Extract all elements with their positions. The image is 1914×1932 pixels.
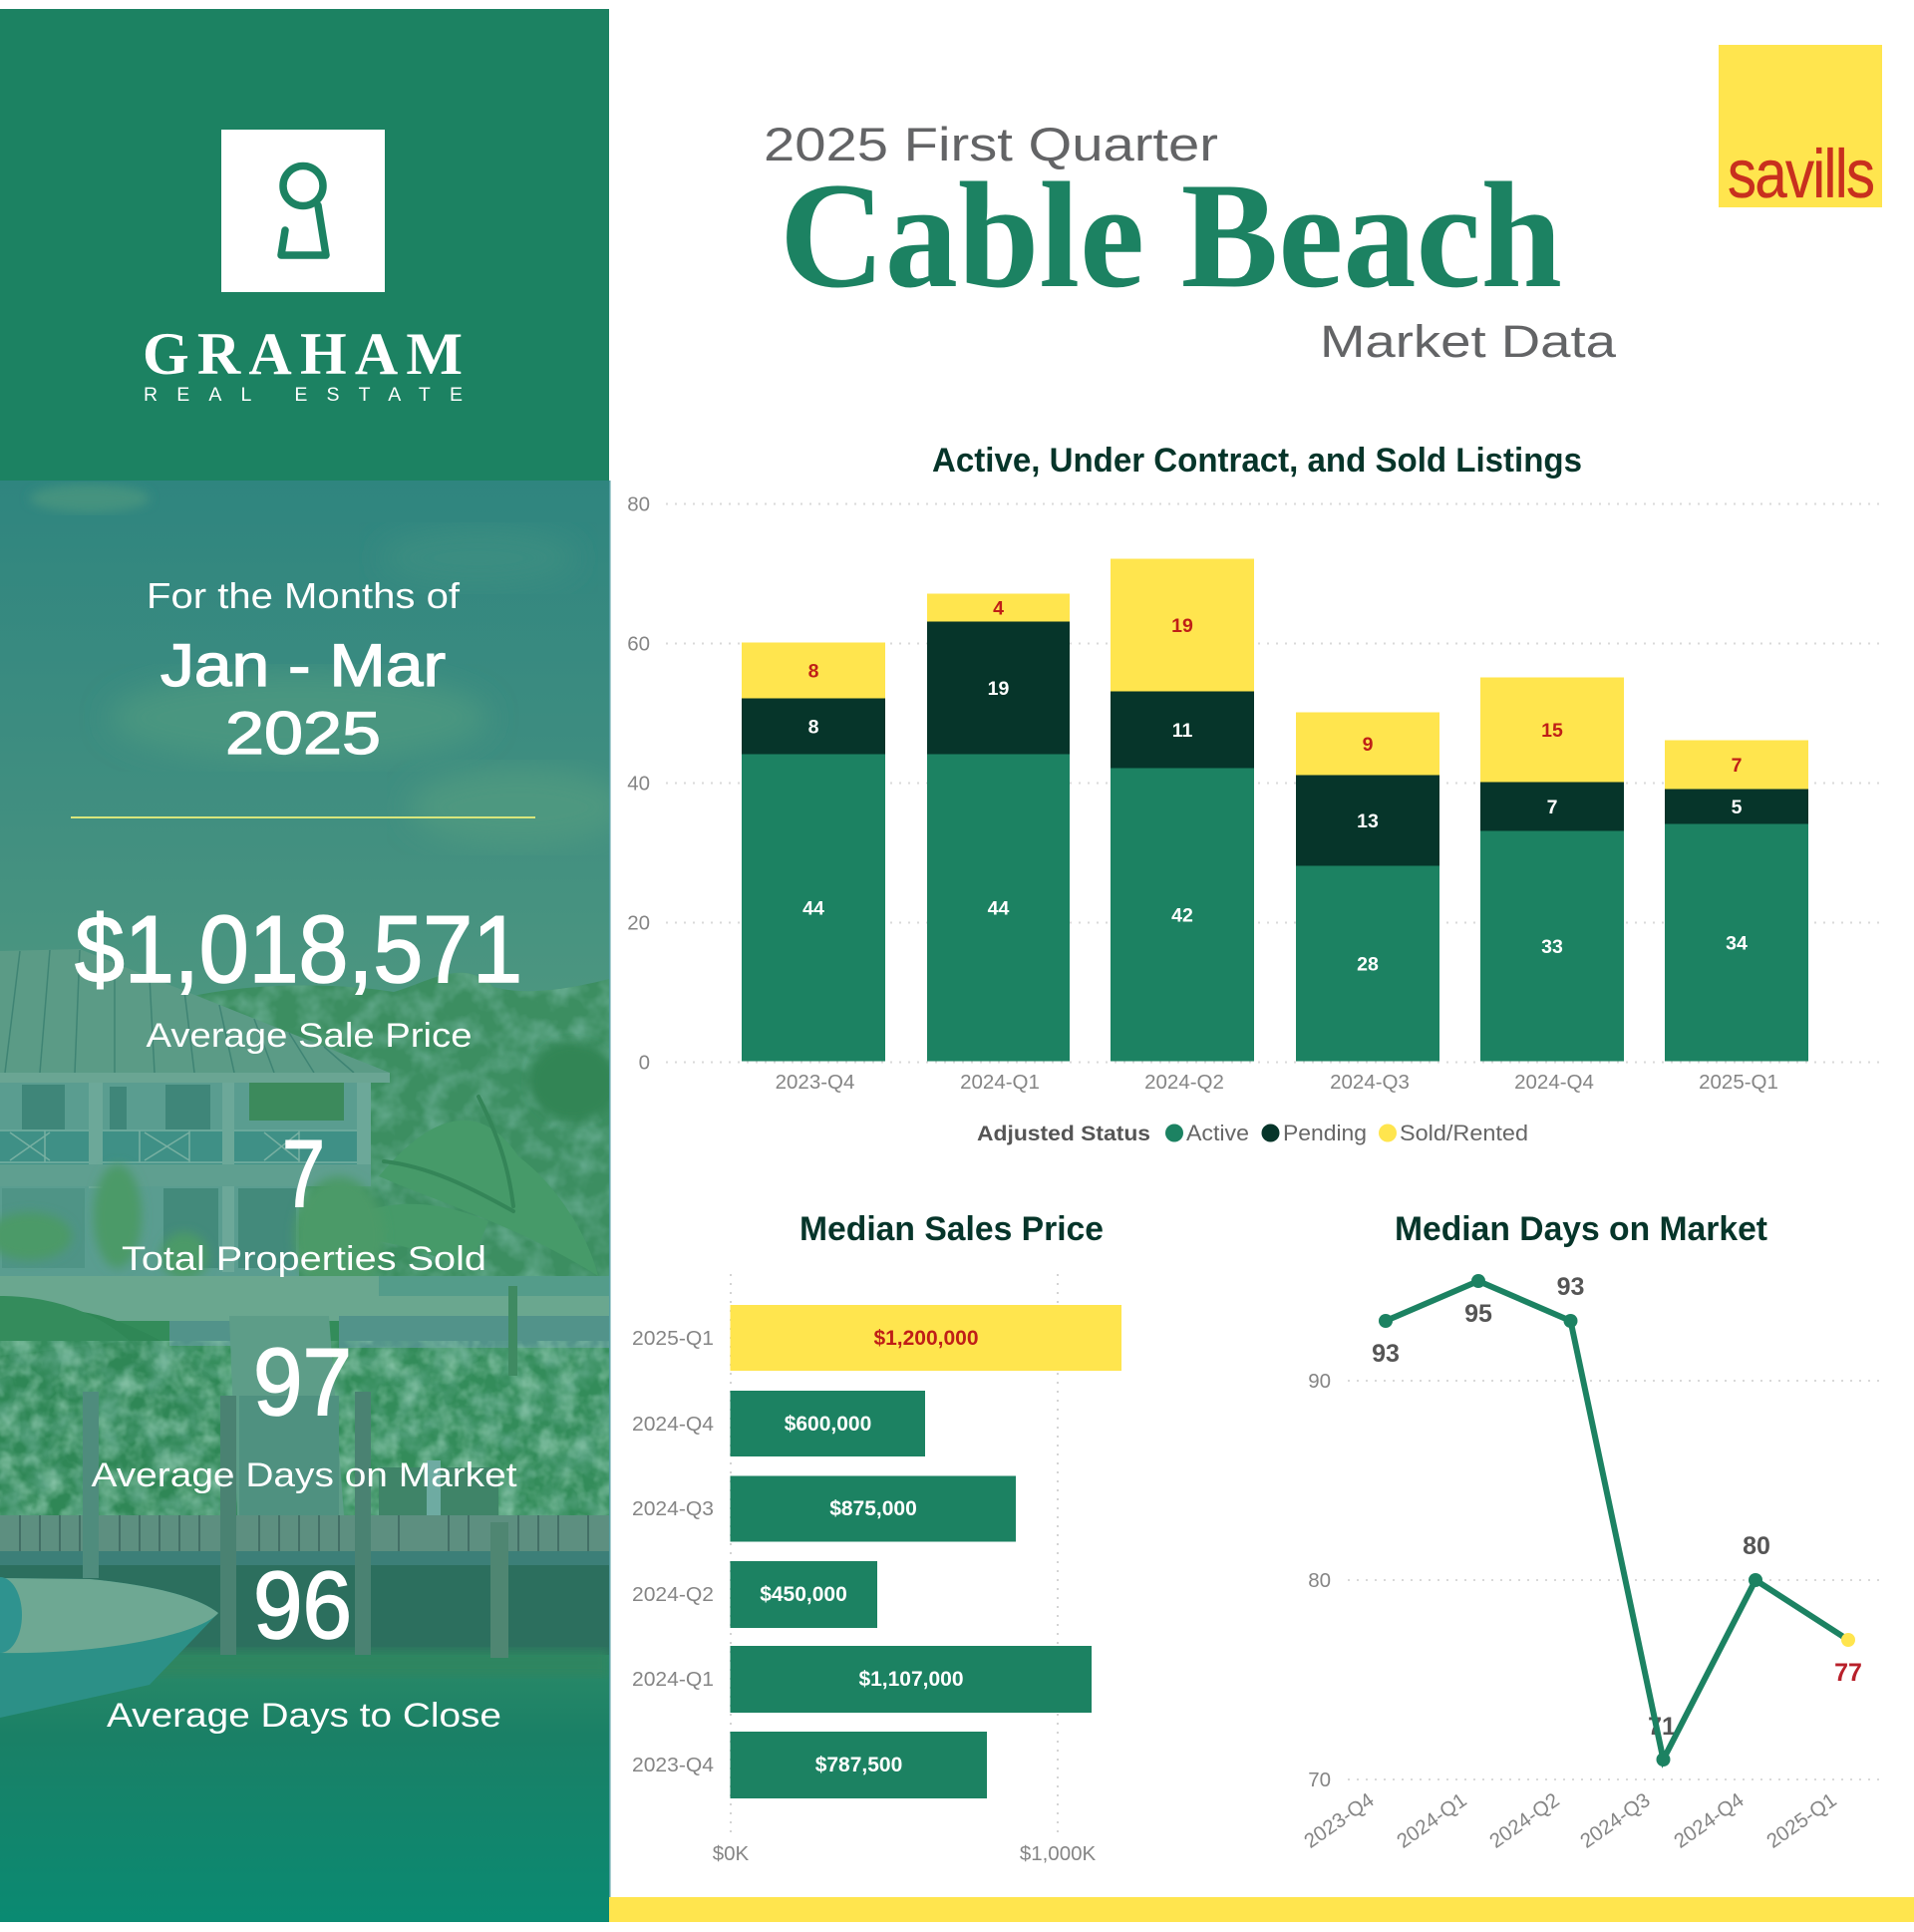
bar: 2025-Q1: 5 (1732, 797, 1743, 818)
bar: 2024-Q3: 13 (1357, 810, 1379, 832)
y axis labels (632, 1327, 714, 1776)
bar: 2024-Q4 (1480, 678, 1624, 1061)
panel: left sidebar (0, 9, 628, 1922)
bar: 2024-Q3: 28 (1357, 953, 1379, 975)
chart: median sales price bars: $1,107,000 (858, 1668, 964, 1691)
x axis labels: $0K (713, 1842, 750, 1865)
title block: Market Data (1320, 316, 1617, 367)
title block (764, 118, 1617, 367)
y axis labels: 2023-Q4 (632, 1754, 714, 1776)
chart: median days line: 80 (1743, 1532, 1770, 1560)
title block: Cable Beach (780, 152, 1562, 319)
icon: keyhole logo (221, 130, 385, 292)
chart: stacked bar listings: 40 (627, 772, 650, 796)
x axis labels rotated: 2024-Q3 (1576, 1788, 1655, 1853)
x axis labels: 2024-Q2 (1144, 1071, 1224, 1094)
chart: median sales price bars (632, 1274, 1121, 1865)
x axis labels (713, 1842, 1097, 1865)
bar: 2024-Q2 (1111, 558, 1254, 1061)
x axis labels rotated: 2023-Q4 (1300, 1788, 1379, 1853)
chart: median sales price bars: $600,000 (785, 1413, 871, 1436)
chart: stacked bar listings: 80 (627, 492, 650, 516)
legend: Pending (1283, 1121, 1367, 1145)
y axis labels: 2024-Q3 (632, 1497, 714, 1520)
stat: average sale price (75, 896, 522, 1055)
y axis labels: 2024-Q2 (632, 1583, 714, 1606)
chart: median days line: 77 (1834, 1659, 1862, 1687)
heading: listings chart: Active, Under Contract, and Sold Listings (932, 442, 1582, 480)
icon: savills logo: savills (1728, 138, 1875, 212)
x axis labels: 2023-Q4 (776, 1071, 854, 1094)
bar: 2024-Q4: 7 (1547, 797, 1557, 818)
bar: 2024-Q2: 11 (1172, 720, 1192, 742)
logo wordmark: GRAHAM (143, 321, 463, 387)
chart: median days line: 70 (1308, 1769, 1331, 1791)
photo background: waterfront house (0, 481, 628, 1922)
x axis labels rotated: 2024-Q4 (1670, 1788, 1749, 1853)
x axis labels (776, 1071, 1778, 1094)
date range text (147, 575, 461, 767)
stat: total properties sold (122, 1121, 486, 1278)
bar: 2023-Q4: 44 (802, 897, 824, 919)
bar: 2024-Q3: 9 (1363, 734, 1374, 756)
chart: median days line: 93 (1557, 1273, 1584, 1301)
bar: 2024-Q4: 15 (1541, 720, 1563, 742)
chart: median sales price bars: $787,500 (815, 1754, 902, 1776)
heading: median sales price: Median Sales Price (799, 1210, 1104, 1248)
legend (977, 1121, 1528, 1145)
chart: median sales price bars: $875,000 (829, 1497, 917, 1520)
bar: 2023-Q4: 8 (808, 660, 819, 682)
x axis labels: 2025-Q1 (1699, 1071, 1778, 1094)
x axis labels: $1,000K (1020, 1842, 1097, 1865)
footer bar (609, 1897, 1914, 1922)
x axis labels rotated: 2024-Q1 (1393, 1788, 1471, 1853)
stat: average days on market: 97 (253, 1329, 352, 1436)
heading: median days on market: Median Days on Market (1395, 1210, 1767, 1248)
legend: Sold/Rented (1400, 1121, 1528, 1145)
bar: 2025-Q1 (1665, 740, 1808, 1061)
chart: median days line: 80 (1308, 1569, 1331, 1592)
x axis labels rotated: 2025-Q1 (1762, 1788, 1841, 1853)
date range text: Jan - Mar (160, 632, 446, 699)
y axis labels: 2025-Q1 (632, 1327, 714, 1350)
chart: median days line: 95 (1464, 1300, 1492, 1328)
legend: Active (1186, 1121, 1249, 1145)
stat: average days to close: Average Days to Close (107, 1697, 501, 1735)
logo wordmark: REAL ESTATE (144, 384, 463, 406)
date range text: For the Months of (147, 575, 461, 616)
title block: 2025 First Quarter (764, 118, 1218, 170)
stat: average days on market (92, 1329, 517, 1494)
stat: total properties sold: 7 (282, 1121, 325, 1227)
chart: median days line: 93 (1372, 1340, 1400, 1368)
bar: 2024-Q3 (1296, 712, 1439, 1061)
chart: stacked bar listings: 0 (639, 1051, 650, 1075)
icon: savills logo (1719, 45, 1882, 212)
chart: median sales price bars: $1,200,000 (873, 1327, 979, 1350)
bar: 2024-Q1: 19 (988, 678, 1009, 700)
chart: median days line: 90 (1308, 1370, 1331, 1393)
date range text: 2025 (225, 700, 381, 767)
y axis labels: 2024-Q1 (632, 1668, 714, 1691)
x axis labels: 2024-Q3 (1330, 1071, 1410, 1094)
bar: 2025-Q1: 34 (1726, 933, 1748, 955)
x axis labels: 2024-Q1 (960, 1071, 1040, 1094)
bar: 2024-Q2: 19 (1171, 615, 1193, 637)
bar: 2023-Q4: 8 (808, 716, 819, 738)
legend: Adjusted Status (977, 1122, 1150, 1145)
x axis labels rotated (1300, 1788, 1841, 1853)
panel: logo header (0, 9, 609, 481)
x axis labels rotated: 2024-Q2 (1485, 1788, 1564, 1853)
stat: average days to close: 96 (253, 1552, 352, 1659)
bar: 2024-Q1: 44 (988, 897, 1009, 919)
chart: median sales price bars: $450,000 (760, 1583, 847, 1606)
bar: 2024-Q1: 4 (993, 598, 1004, 620)
chart: median days line: 71 (1648, 1713, 1676, 1741)
chart: stacked bar listings: 60 (627, 632, 650, 656)
stat: average days to close (107, 1552, 501, 1735)
stat: total properties sold: Total Properties Sold (122, 1240, 486, 1278)
chart: stacked bar listings (627, 492, 1884, 1145)
bar: 2025-Q1: 7 (1732, 755, 1742, 777)
x axis labels: 2024-Q4 (1514, 1071, 1594, 1094)
y axis labels: 2024-Q4 (632, 1413, 714, 1436)
bar: 2024-Q2: 42 (1171, 905, 1193, 927)
stat: average sale price: Average Sale Price (146, 1017, 473, 1055)
bar: 2024-Q4: 33 (1541, 936, 1563, 958)
stat: average sale price: $1,018,571 (75, 896, 522, 1003)
chart: median days line (1300, 1273, 1882, 1853)
chart: stacked bar listings: 20 (627, 911, 650, 935)
bar: 2023-Q4 (742, 642, 885, 1061)
stat: average days on market: Average Days on Market (92, 1456, 517, 1494)
bar: 2024-Q1 (927, 594, 1070, 1061)
